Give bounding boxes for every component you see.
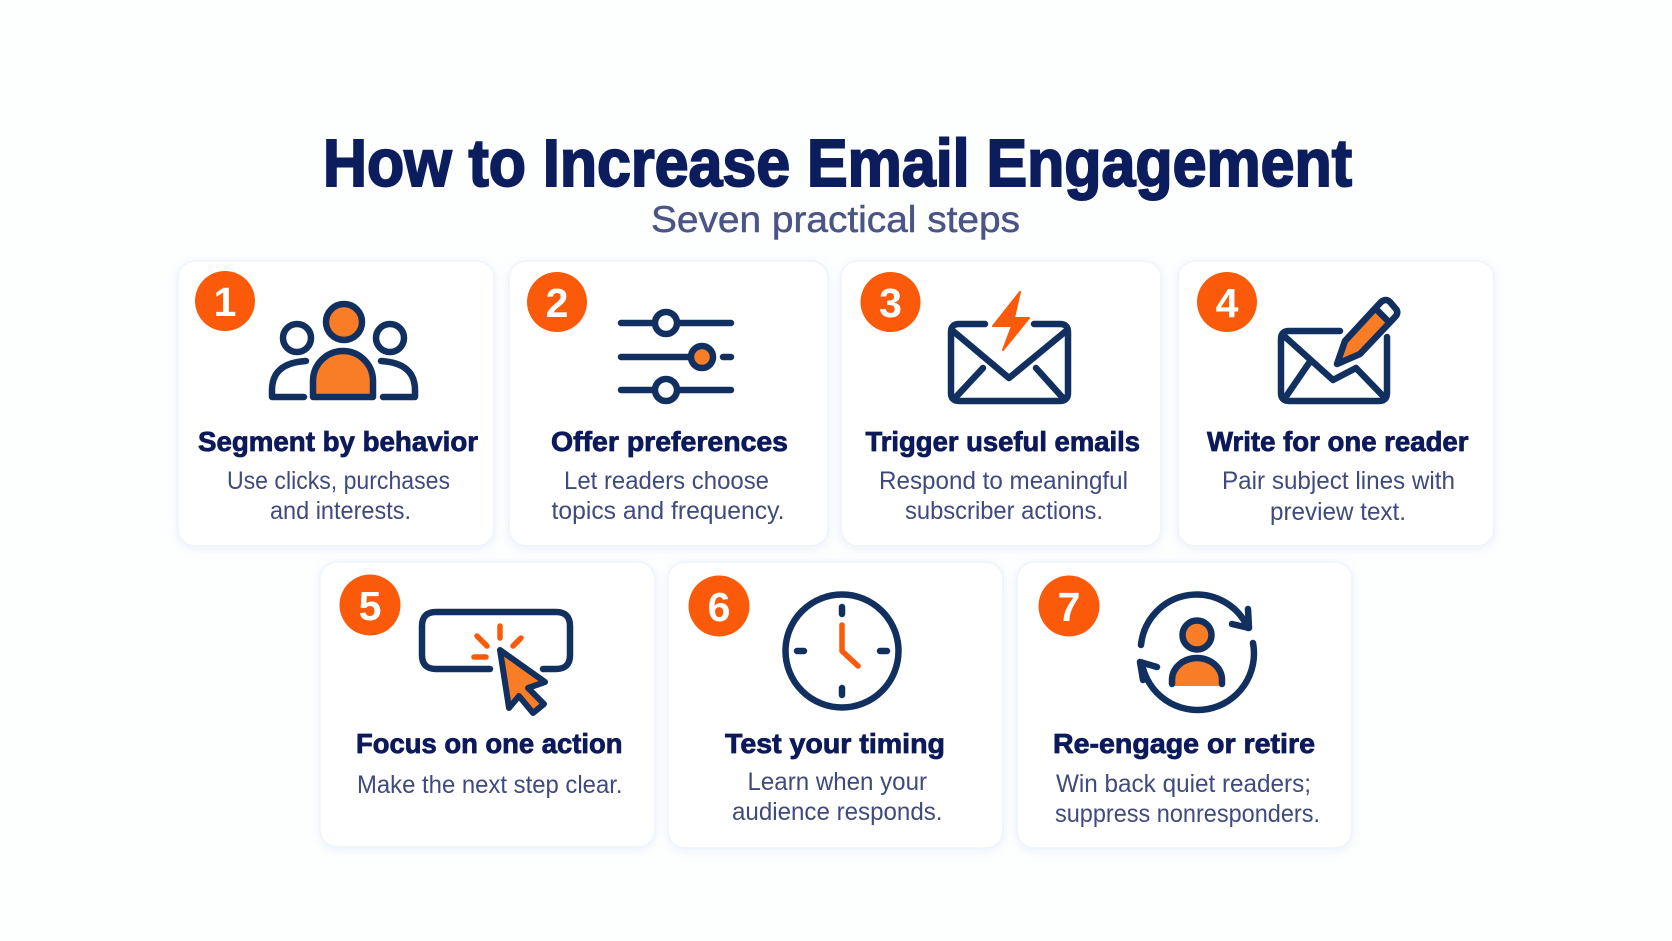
panel: step 7 re-engage or retire <box>1017 562 1352 848</box>
heading: re-engage or retire: Re-engage or retire <box>1053 728 1315 759</box>
icon: people group <box>272 304 415 397</box>
panel: step 1 segment by behavior <box>178 261 494 546</box>
icon: sliders <box>621 312 731 401</box>
description <box>1222 467 1455 526</box>
heading: write for one reader: Write for one reader <box>1207 426 1469 457</box>
badge: 7: 7 <box>1058 584 1080 630</box>
icon: button with cursor click <box>422 612 570 713</box>
description <box>227 467 450 525</box>
icon: envelope with pencil <box>1281 300 1397 401</box>
badge: 5 <box>340 574 400 636</box>
panel: step 4 write for one reader <box>1178 261 1494 546</box>
badge: 4: 4 <box>1216 280 1239 326</box>
icon: envelope with lightning bolt <box>951 292 1068 401</box>
badge: 1 <box>195 271 255 331</box>
description <box>552 467 784 525</box>
panel: step 6 test your timing <box>668 562 1003 848</box>
description: preview text. <box>1270 498 1406 526</box>
badge: 1: 1 <box>214 279 236 325</box>
badge: 6 <box>688 576 750 636</box>
description: Respond to meaningful <box>879 467 1128 495</box>
heading: segment by behavior: Segment by behavior <box>198 426 478 457</box>
description: Pair subject lines with <box>1222 467 1455 495</box>
description: suppress nonresponders. <box>1055 800 1320 828</box>
icon: clock <box>786 594 898 708</box>
badge: 4 <box>1197 272 1257 332</box>
heading: test your timing: Test your timing <box>725 728 945 759</box>
badge: 3: 3 <box>879 280 902 326</box>
panel: step 2 offer preferences <box>509 261 828 546</box>
description <box>879 467 1128 525</box>
description: Let readers choose <box>564 467 769 495</box>
description: audience responds. <box>732 798 942 826</box>
description: and interests. <box>270 497 411 525</box>
icon: person in refresh cycle <box>1140 595 1254 710</box>
description: Use clicks, purchases <box>227 467 450 495</box>
badge: 3 <box>860 272 920 332</box>
heading: offer preferences: Offer preferences <box>551 426 788 457</box>
description: topics and frequency. <box>552 497 784 525</box>
badge: 6: 6 <box>708 584 730 630</box>
heading: focus on one action: Focus on one action <box>356 728 622 759</box>
description: subscriber actions. <box>905 497 1103 525</box>
description: Win back quiet readers; <box>1056 770 1311 798</box>
panel: step 5 focus on one action <box>320 562 655 847</box>
panel: step 3 trigger useful emails <box>841 261 1161 546</box>
title: How to Increase Email Engagement <box>323 126 1352 201</box>
badge: 2 <box>527 272 587 332</box>
badge: 7 <box>1038 576 1100 636</box>
description: Make the next step clear. <box>357 771 622 799</box>
subtitle: Seven practical steps <box>651 199 1020 240</box>
description: Learn when your <box>748 768 927 796</box>
badge: 5: 5 <box>359 583 381 629</box>
description <box>1055 770 1320 828</box>
description <box>732 768 942 826</box>
badge: 2: 2 <box>546 280 568 326</box>
heading: trigger useful emails: Trigger useful emails <box>866 426 1140 457</box>
